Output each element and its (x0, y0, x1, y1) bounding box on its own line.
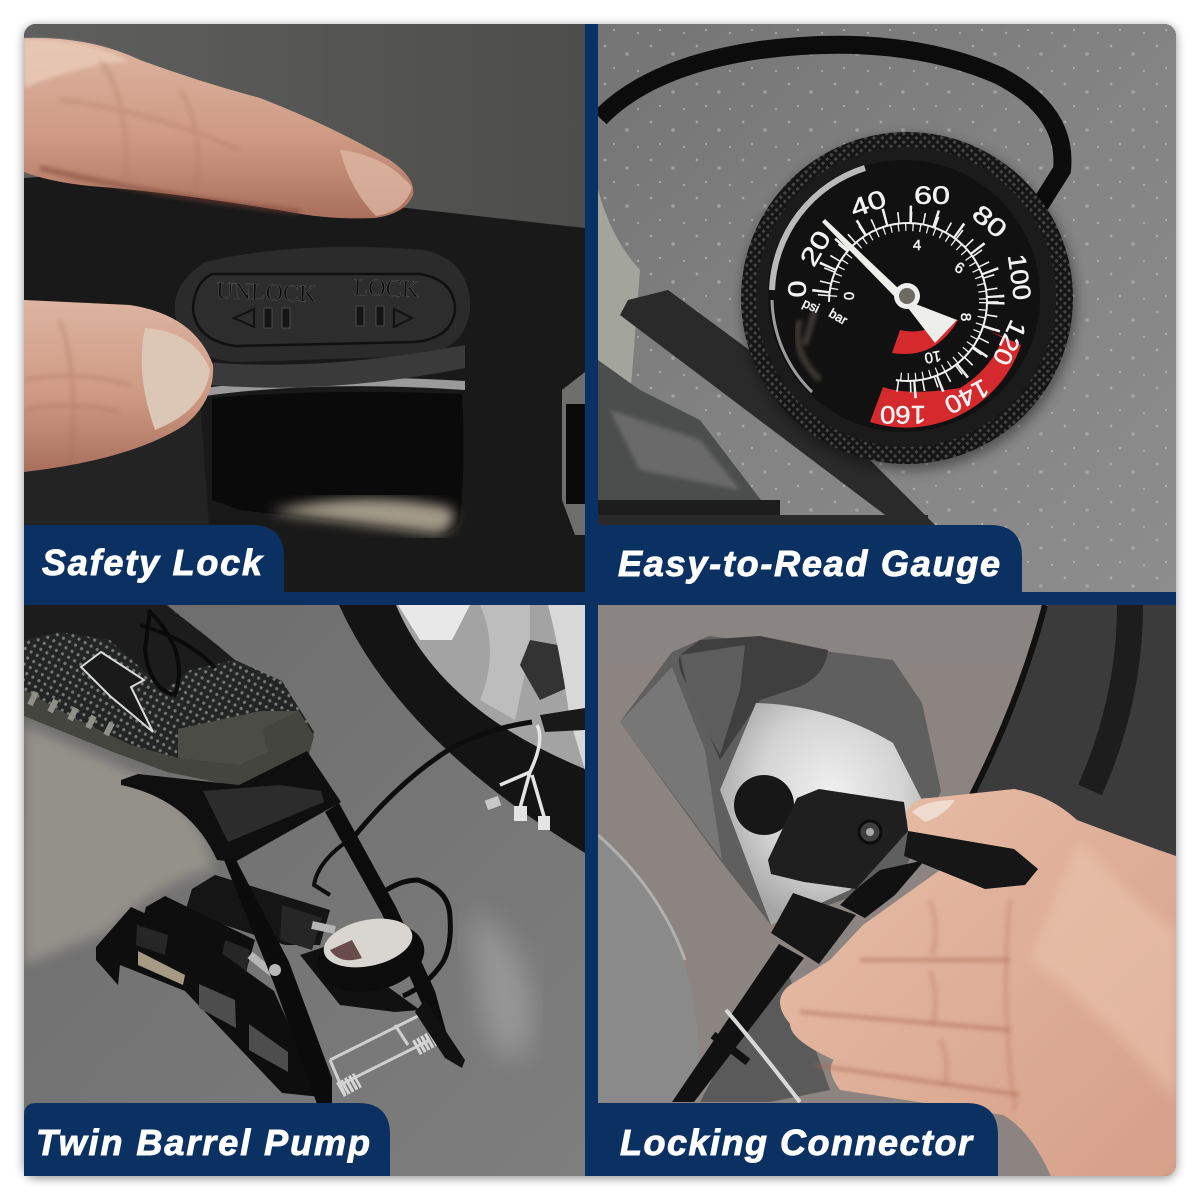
psi scale numbers (784, 182, 1036, 428)
label: easy-to-read gauge: Easy-to-Read Gauge (618, 543, 1000, 584)
hose and chuck (672, 775, 1038, 1102)
bar scale numbers: 10 (923, 347, 942, 366)
gauge (741, 132, 1076, 470)
horizontal divider (24, 592, 1176, 605)
wheel opening (620, 636, 941, 925)
panel: twin barrel pump (24, 605, 585, 1176)
panel: locking connector (598, 605, 1176, 1176)
barrels (185, 875, 330, 945)
front leg (224, 858, 332, 1104)
psi scale numbers: 60 (914, 182, 950, 210)
label: safety lock: Safety Lock (42, 542, 264, 583)
hose inner loop (312, 842, 344, 897)
lock slider: LOCK (353, 275, 420, 303)
label: locking connector: Locking Connector (620, 1122, 974, 1163)
psi scale numbers: 100 (1002, 252, 1036, 302)
psi scale numbers: 20 (795, 226, 837, 271)
vertical divider (585, 24, 598, 1176)
lock slider (175, 247, 470, 388)
top finger (24, 38, 413, 218)
lock labels: UNLOCK (216, 278, 317, 308)
bar scale numbers: 0 (841, 292, 858, 300)
rear leg (325, 803, 446, 1032)
bar scale numbers: 4 (913, 237, 921, 254)
boot (24, 605, 314, 787)
bar scale numbers: 8 (957, 313, 974, 321)
glass highlight (772, 168, 865, 290)
bottom finger (24, 300, 213, 472)
hand (780, 789, 1176, 1176)
tire (972, 605, 1176, 860)
lower disc (598, 835, 699, 1102)
psi scale numbers: 120 (987, 316, 1032, 369)
bar scale numbers (801, 237, 974, 366)
bar scale numbers: psi (801, 295, 822, 316)
needle (822, 219, 957, 343)
psi scale numbers: 80 (967, 199, 1012, 244)
tire and wheel (339, 605, 585, 853)
hose and adapters (353, 708, 585, 838)
psi scale numbers: 140 (940, 373, 993, 419)
bar scale numbers: bar (826, 305, 851, 328)
rods and springs (330, 1015, 430, 1095)
label: twin barrel pump: Twin Barrel Pump (36, 1122, 370, 1163)
label: easy-to-read gauge (585, 525, 1022, 605)
hose (600, 45, 1062, 205)
panel: easy-to-read gauge (598, 24, 1176, 592)
scale ticks (820, 214, 996, 390)
psi scale numbers: 40 (847, 185, 890, 223)
pump body (24, 172, 585, 592)
red zone (870, 330, 1021, 428)
speckled floor patch (24, 725, 212, 965)
bar scale numbers: 6 (951, 259, 967, 278)
label: safety lock (24, 525, 284, 605)
label: twin barrel pump (24, 1103, 390, 1176)
label: locking connector (585, 1103, 998, 1176)
pedal and frame (96, 751, 465, 1104)
psi scale numbers: 0 (784, 280, 812, 298)
base (96, 907, 321, 1097)
psi scale numbers: 160 (880, 400, 926, 428)
small gauge (382, 880, 450, 996)
